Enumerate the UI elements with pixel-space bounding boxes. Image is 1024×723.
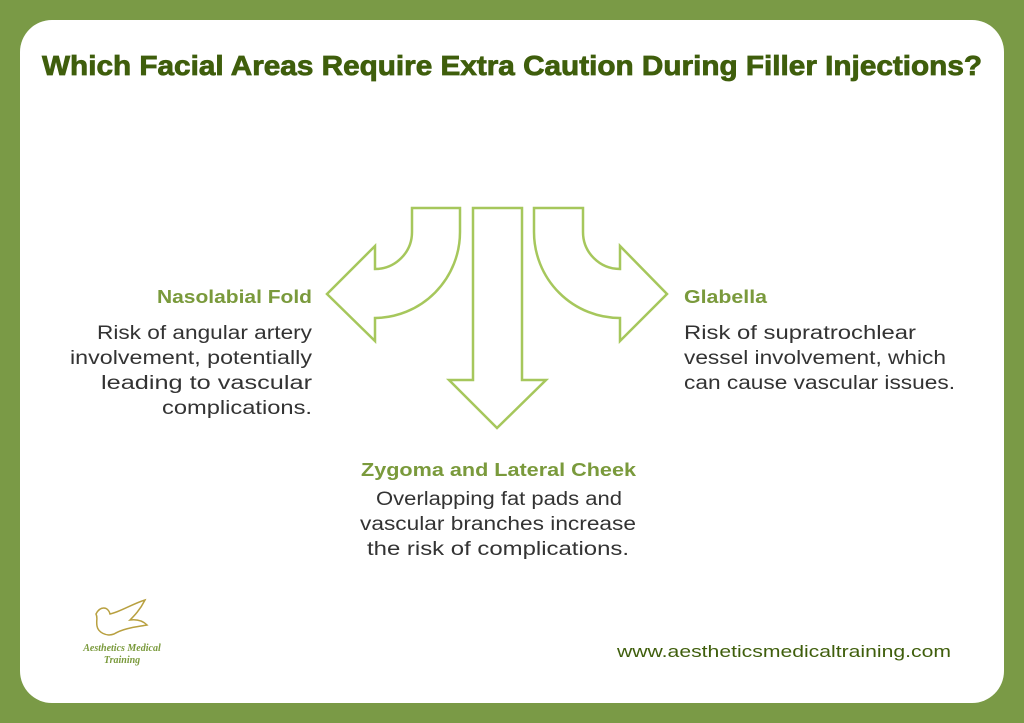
arrows [327,208,667,428]
url: www.aestheticsmedicaltraining.com [616,642,951,661]
title: Which Facial Areas Require Extra Caution During Filler Injections? [42,50,982,81]
text block: glabella: vessel involvement, which [684,348,946,369]
logo text: Aesthetics Medical [82,643,161,654]
heading: glabella: Glabella [684,287,768,307]
panel: nasolabial fold [70,287,313,419]
text block: nasolabial: involvement, potentially [70,348,313,369]
icon: dove [96,600,147,635]
text block: nasolabial: complications. [162,398,312,419]
text block: glabella [684,323,955,394]
text block: nasolabial: Risk of angular artery [97,323,313,344]
text block: zygoma [360,489,636,560]
text block: glabella: can cause vascular issues. [684,373,955,394]
panel: glabella [684,287,955,394]
logo: Training [104,655,140,666]
heading: zygoma: Zygoma and Lateral Cheek [361,460,637,480]
text block: zygoma: the risk of complications. [367,539,629,560]
arrow: down [449,208,546,428]
logo [82,600,161,666]
text block: zygoma: Overlapping fat pads and [376,489,622,510]
heading: nasolabial fold: Nasolabial Fold [157,287,312,307]
text block: nasolabial: leading to vascular [101,373,313,394]
arrow: left [327,208,460,341]
text block: zygoma: vascular branches increase [360,514,636,535]
text block: nasolabial [70,323,313,419]
panel: zygoma [360,460,637,560]
arrow: right [534,208,667,341]
text block: glabella: Risk of supratrochlear [684,323,917,344]
